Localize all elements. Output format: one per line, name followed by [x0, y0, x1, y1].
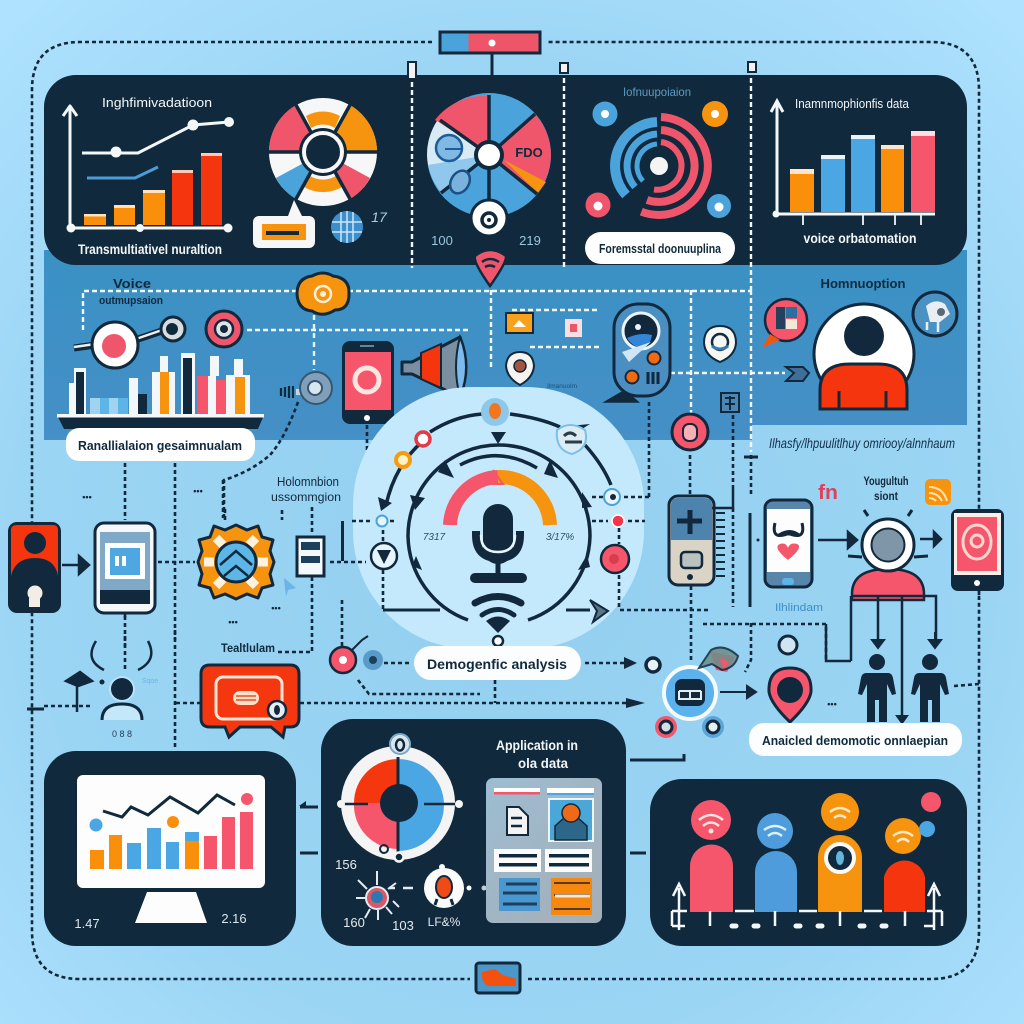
icon: person with drone: Sqoe	[142, 678, 158, 685]
icon: large person avatar	[814, 304, 914, 409]
icon: phone target	[342, 341, 394, 424]
icon: person with drone	[27, 641, 158, 739]
donut chart with callout	[253, 98, 388, 248]
arrow: light blue pointer	[284, 578, 296, 597]
panel dividers	[408, 62, 756, 290]
chart title: Inghfimivadatioon	[102, 95, 212, 110]
dashed arrow to node	[585, 657, 660, 708]
central pie chart: 100	[431, 233, 453, 248]
application title: Application in	[496, 737, 578, 753]
small square icon	[721, 393, 739, 412]
icon: magnifier target	[74, 311, 242, 368]
dashed verticals right of phone	[690, 415, 826, 672]
panel: central voice analysis	[352, 387, 710, 649]
segment: blue	[755, 813, 797, 912]
icon: heart phone	[756, 500, 812, 587]
icon: microphone	[470, 504, 527, 583]
pill label: annotated demographic: Anaicled demomotic onnlaepian	[762, 733, 948, 748]
icon: megaphone	[402, 337, 466, 397]
card: application profile	[486, 778, 602, 923]
band icons: small tags: Ilmanuolm	[547, 383, 577, 390]
arrow chevrons to avatar	[786, 367, 809, 381]
panel: application in data: 160	[343, 915, 365, 930]
chart: transmission line and bars	[63, 95, 234, 257]
nodes near demographic label	[330, 636, 410, 673]
icon: rss square	[925, 479, 951, 505]
arrow to location pin	[720, 686, 756, 698]
icon: document stack	[297, 521, 366, 576]
blue middle band	[44, 250, 967, 440]
arrow to person	[818, 532, 857, 548]
pill label: bar chart caption	[66, 428, 255, 461]
panel: people wifi segments	[650, 779, 967, 946]
icon: red chat bubble	[201, 665, 299, 737]
icon: person card	[8, 522, 61, 613]
panel: application in data: 103	[392, 918, 414, 933]
segment: red	[884, 792, 941, 912]
monitor values: 1.47	[74, 916, 100, 931]
gauge labels: 7317	[423, 532, 446, 543]
arrow to tablet	[62, 556, 89, 574]
icon: right tablet	[951, 509, 1004, 591]
icon: gear	[198, 525, 274, 599]
segment: orange	[818, 793, 862, 912]
icon: person with drone: 0 8 8	[112, 729, 132, 739]
panel: application in data: ola data	[518, 755, 568, 771]
icon: location pin signal	[475, 250, 506, 286]
curved dashed connector	[224, 402, 298, 520]
small dark data tags: •••	[82, 492, 92, 502]
top dark panel	[44, 75, 967, 265]
small dark data tags: •••	[271, 603, 281, 613]
donut chart with callout: 17	[371, 209, 388, 225]
icon: location pin	[769, 636, 811, 722]
panel: application in data: LF&%	[428, 915, 461, 929]
icon: white location badge	[704, 326, 736, 362]
icon: robot device	[605, 304, 670, 402]
gauge	[450, 477, 498, 525]
voice text block	[99, 276, 163, 307]
panel: central voice analysis: 3/17%	[546, 532, 574, 543]
dashed label connector	[176, 640, 632, 703]
axis and ticks	[672, 884, 942, 930]
segment: pink	[690, 800, 733, 912]
top tab	[440, 32, 540, 75]
person with links to two people	[826, 510, 941, 723]
icon: cone	[699, 648, 738, 672]
node connectors	[352, 402, 710, 610]
application values: 156	[335, 857, 357, 872]
bar chart: informational data: voice orbatomation	[804, 230, 916, 246]
ring nodes	[481, 398, 509, 426]
ring arrowheads	[378, 424, 592, 570]
bar chart on tray	[57, 353, 264, 429]
connector from blob	[313, 315, 315, 370]
radial title: Iofnuupoiaion	[623, 85, 691, 99]
chart caption: Transmultiativel nuraltion	[78, 241, 222, 257]
band icons: small tags	[506, 313, 582, 390]
bar chart: informational data: Inamnmophionfis data	[795, 96, 910, 111]
central pie chart	[427, 93, 551, 248]
panel: monitor chart: 2.16	[221, 911, 247, 926]
voice text block: Voice	[113, 276, 151, 291]
outer ring	[386, 414, 611, 505]
arrow to tablet right	[920, 532, 941, 546]
label: Tealtlulam: Tealtlulam	[221, 641, 275, 655]
pill label: forecast consumption	[585, 232, 735, 264]
blue label under phone: Ilhlindam	[775, 602, 823, 614]
short solid connectors	[744, 457, 758, 607]
icon: small circle badge	[913, 292, 957, 336]
pie label: FDO	[515, 145, 543, 160]
icon: small person badge	[424, 864, 486, 908]
icon: speech badge	[762, 299, 807, 348]
pill label: annotated demographic	[749, 723, 962, 756]
dashed frame connector	[954, 591, 979, 686]
icon: wifi	[475, 596, 521, 646]
small dark data tags: •••	[827, 699, 837, 709]
small dark data tags	[82, 486, 837, 709]
panel: application in data	[321, 719, 626, 946]
panel: monitor chart	[44, 751, 296, 946]
two people icons	[858, 654, 949, 722]
text block: holomation consumption: Holomnbion	[277, 475, 339, 489]
icon: burst node	[356, 871, 413, 920]
text block: right row heading: Ilhasfy/lhpuulitlhuy omriooy/alnnhaum	[769, 435, 955, 451]
text block: targeted signal: siont	[874, 489, 898, 503]
pill label: demographic analysis	[414, 646, 581, 680]
text block: targeted signal	[864, 474, 908, 503]
icon: tablet	[95, 523, 155, 613]
white dashed band connectors	[83, 290, 785, 452]
connectors between bottom panels	[299, 754, 684, 853]
dashed lines under phone	[125, 425, 367, 750]
icon: red glyph: fn	[818, 482, 838, 504]
icon: phone with keys	[669, 485, 733, 585]
small dark data tags: •••	[193, 486, 203, 496]
node cluster: blue core circle	[655, 667, 724, 738]
icon: orange blob	[297, 273, 349, 314]
pill label: bar chart caption: Ranallialaion gesaimnualam	[78, 438, 242, 453]
small dark data tags: •••	[228, 617, 238, 627]
bar chart: informational data	[771, 96, 935, 246]
text block: targeted signal: Yougultuh	[864, 474, 908, 488]
bottom tab icon	[476, 963, 520, 993]
pill label: demographic analysis: Demogenfic analysis	[427, 656, 567, 672]
text block: holomation consumption: ussommgion	[271, 490, 341, 504]
voice text block: outmupsaion	[99, 295, 163, 307]
dashed tablet to gear	[125, 480, 342, 660]
text block: holomation consumption	[271, 475, 341, 504]
label: homeownership: Homnuoption	[820, 276, 906, 291]
icon: pink pill badge	[672, 414, 708, 450]
pill label: forecast consumption: Foremsstal doonuuplina	[599, 241, 722, 256]
icon: lens sensor	[281, 372, 332, 404]
radial chart with dots	[586, 85, 731, 218]
application donut	[337, 734, 463, 862]
inner ring	[408, 445, 590, 620]
central pie chart: 219	[519, 233, 541, 248]
